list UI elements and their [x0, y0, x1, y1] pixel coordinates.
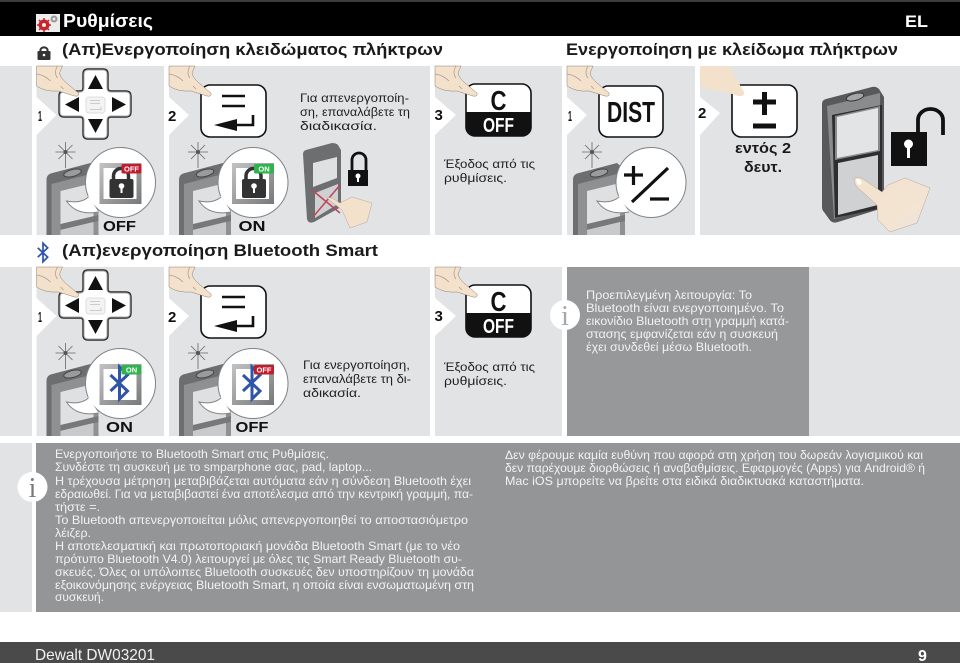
text: repeat to deactivate: Για απενεργοποίη- — [300, 91, 409, 105]
text: left column notes: τήστε =. — [55, 500, 100, 514]
panel: activate step 1 — [567, 66, 695, 235]
text: left column notes: εδραιωθεί. Για να μεταβιβαστεί ένα αποτέλεσμα από την κεντρική γραμμή, πα- — [55, 487, 473, 501]
key: C OFF: C — [490, 85, 506, 116]
text: repeat to deactivate: ση, επαναλάβετε τη — [300, 105, 410, 119]
heading: activate with key lock: Ενεργοποίηση με κλείδωμα πλήκτρων — [566, 40, 898, 59]
text: repeat to deactivate: διαδικασία. — [300, 119, 377, 133]
panel: bluetooth step 2 — [168, 267, 430, 436]
panel: key lock step 1: 1 — [38, 108, 42, 125]
panel: bluetooth step 2: OFF — [236, 419, 268, 436]
panel: key lock step 1 — [36, 66, 164, 235]
left margin strip row 2 — [0, 267, 32, 436]
icon: info — [550, 300, 580, 332]
panel: key lock step 3: 3 — [434, 107, 443, 124]
text: default setting note: Bluetooth είναι ενεργοποιημένο. Το — [586, 301, 784, 315]
panel: activate step 2: 2 — [698, 105, 706, 122]
panel: key lock step 1: OFF — [103, 218, 136, 235]
panel: bluetooth notes — [18, 443, 960, 612]
icon: open padlock — [891, 109, 943, 166]
panel: bluetooth step 2: OFF — [256, 366, 272, 374]
text: left column notes: εξοικονόμησης ενέργειας Bluetooth Smart, η οποία είναι ενσωματωμένη στη — [55, 578, 474, 592]
panel: bluetooth step 1 — [36, 267, 164, 436]
text: repeat to activate: Για ενεργοποίηση, — [303, 358, 410, 372]
text: left column notes: συσκευή. — [55, 590, 104, 604]
text: within 2 seconds — [735, 141, 791, 176]
icon: info: i — [561, 301, 569, 332]
title: Ρυθμίσεις — [63, 10, 153, 31]
text: repeat to deactivate — [300, 91, 410, 133]
panel: activate step 2 — [698, 66, 960, 235]
key: plus minus — [732, 85, 797, 137]
text: left column notes — [55, 447, 474, 604]
text: default setting note: στασης εμφανίζεται εάν η συσκευή — [586, 327, 778, 341]
text: default setting note: έχει συνδεθεί μέσω Bluetooth. — [586, 340, 752, 354]
footer bar — [0, 642, 960, 663]
key: DIST — [599, 86, 663, 137]
panel: key lock step 2: 2 — [168, 108, 176, 125]
text: left column notes: Το Bluetooth απενεργοποιείται μόλις απενεργοποιηθεί το αποστασιόμετρο — [55, 513, 468, 527]
heading: bluetooth smart: (Απ)ενεργοποίηση Bluetooth Smart — [62, 241, 378, 260]
icon: device with finger — [822, 87, 930, 232]
text: right column disclaimer: δεν παρέχουμε διορθώσεις ή αναβαθμίσεις. Εφαρμογές (Apps) για Android® ή — [505, 461, 925, 475]
text: left column notes: πρότυπο Bluetooth V4.0) λειτουργεί με όλες τις Smart Ready Bluetooth συ- — [55, 552, 462, 566]
text: exit settings: Έξοδος από τις — [443, 157, 535, 171]
icon: crossed device and lock — [303, 143, 372, 228]
panel: bluetooth step 3 — [434, 267, 562, 436]
heading: key lock on off: (Απ)Ενεργοποίηση κλειδώματος πλήκτρων — [62, 40, 443, 59]
panel: key lock step 1: OFF — [124, 164, 139, 174]
panel: bluetooth step 1: ON — [106, 419, 133, 436]
text: left column notes: Ενεργοποιήστε το Bluetooth Smart στις Ρυθμίσεις. — [55, 447, 329, 461]
text: left column notes: Η αποτελεσματική και πρωτοποριακή μονάδα Bluetooth Smart (με το νέο — [55, 539, 460, 553]
icon: info — [18, 472, 48, 504]
text: left column notes: σκευές. Όλες οι υπόλοιπες Bluetooth συσκευές δεν υποστηρίζουν τη μονάδα — [55, 565, 474, 579]
icon: settings gears — [36, 14, 60, 32]
text: default setting note: εικονίδιο Bluetooth στη γραμμή κατά- — [586, 314, 789, 328]
key: C OFF — [466, 84, 531, 137]
left margin strip row 3 — [0, 443, 32, 612]
icon: padlock heading — [38, 47, 50, 60]
left margin strip row 1 — [0, 66, 32, 235]
text: right column disclaimer: Δεν φέρουμε καμία ευθύνη που αφορά στη χρήση του δωρεάν λογισμικού και — [505, 448, 923, 462]
text: exit settings: ρυθμίσεις. — [444, 374, 507, 388]
icon: bluetooth heading — [38, 243, 48, 262]
panel: key lock step 3 — [434, 66, 562, 235]
text: repeat to activate: επαναλάβετε τη δι- — [303, 372, 411, 386]
text: exit settings: ρυθμίσεις. — [444, 171, 507, 185]
text: default setting note — [586, 288, 789, 354]
panel: bluetooth step 1: 1 — [38, 309, 42, 326]
panel: bluetooth default info — [550, 267, 960, 436]
panel: key lock step 2: ON — [258, 164, 270, 174]
panel: bluetooth step 3: 3 — [434, 308, 443, 325]
text: default setting note: Προεπιλεγμένη λειτουργία: Το — [586, 288, 752, 302]
key: DIST: DIST — [607, 97, 655, 129]
language code: EL — [905, 12, 928, 31]
text: exit settings: Έξοδος από τις — [443, 360, 535, 374]
icon: info: i — [29, 473, 37, 504]
text: within 2 seconds: δευτ. — [744, 160, 782, 176]
text: left column notes: Συνδέστε τη συσκευή με το smparphone σας, pad, laptop... — [55, 460, 372, 474]
panel: bluetooth step 1: ON — [126, 366, 137, 374]
text: repeat to activate — [303, 358, 411, 400]
key: C OFF: C — [490, 286, 506, 317]
panel: bluetooth step 2: 2 — [168, 309, 176, 326]
panel: activate step 1: 1 — [568, 108, 572, 125]
text: right column disclaimer: Mac iOS μπορείτε να βρείτε στα ειδικά διαδικτυακά καταστήματα. — [505, 474, 864, 488]
text: left column notes: Η τρέχουσα μέτρηση μεταβιβάζεται αυτόματα εάν η σύνδεση Bluetooth έχει — [55, 474, 471, 488]
text: within 2 seconds: εντός 2 — [735, 141, 791, 157]
icon: plus slash minus — [624, 166, 669, 202]
text: exit settings — [443, 157, 535, 185]
panel: key lock step 2: ON — [238, 218, 266, 235]
text: right column disclaimer — [505, 448, 925, 488]
header bar — [0, 0, 960, 36]
panel: key lock step 2 — [168, 66, 430, 235]
text: repeat to activate: αδικασία. — [303, 386, 361, 400]
key: C OFF: OFF — [483, 115, 514, 137]
text: exit settings — [443, 360, 535, 388]
key: C OFF: OFF — [483, 316, 514, 338]
text: left column notes: λέιζερ. — [55, 526, 91, 540]
key: C OFF — [466, 285, 531, 338]
